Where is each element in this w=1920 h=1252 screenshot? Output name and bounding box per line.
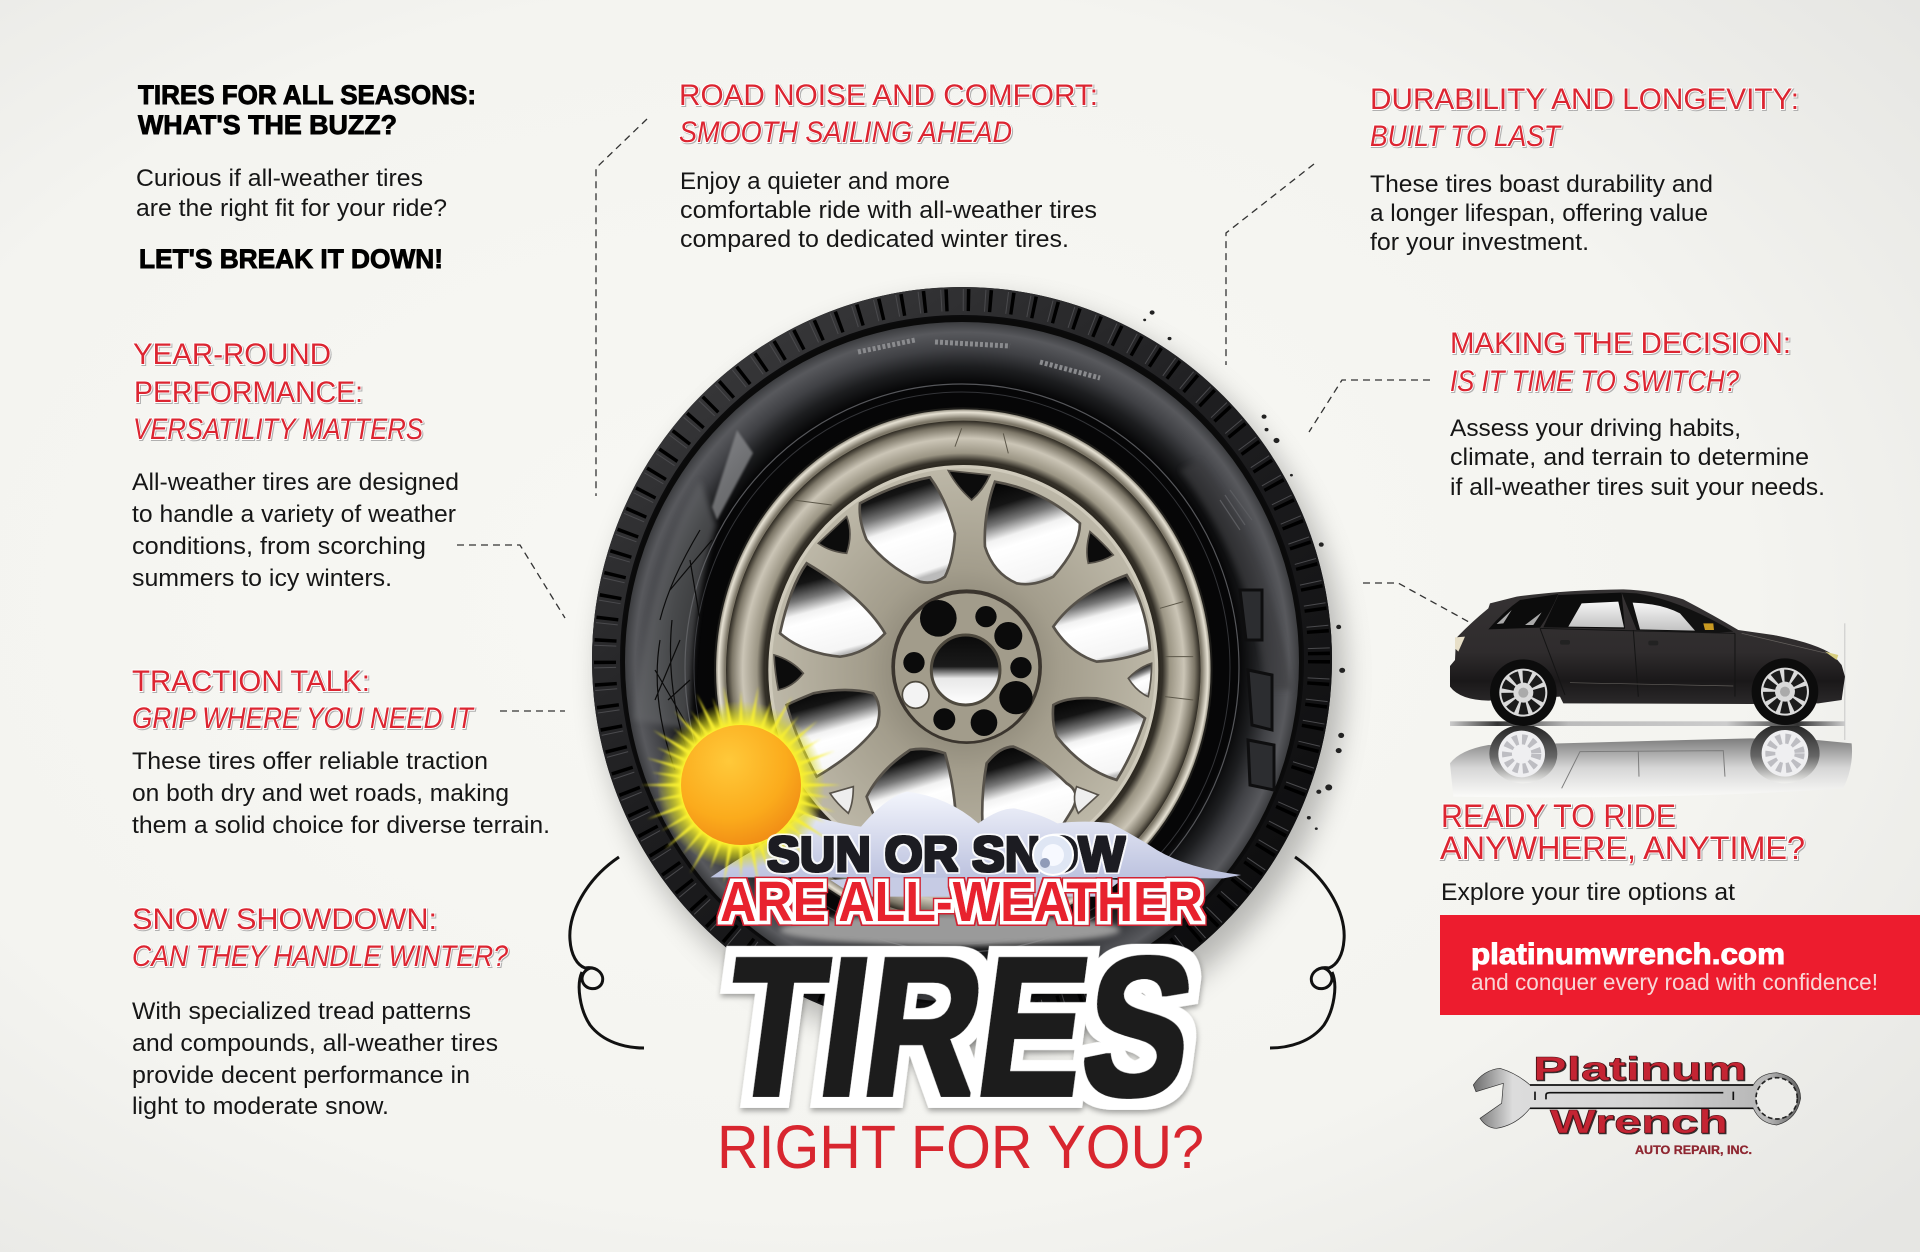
body text: Enjoy a quieter and more	[680, 168, 950, 195]
heading: SNOW SHOWDOWN:	[132, 903, 437, 936]
body text	[680, 168, 1097, 253]
heading: SMOOTH SAILING AHEAD	[679, 116, 1012, 149]
wheel hub	[891, 589, 1042, 744]
intro heading: WHAT'S THE BUZZ?	[138, 110, 397, 140]
body text: light to moderate snow.	[132, 1093, 389, 1120]
website address: platinumwrench.com	[1471, 938, 1785, 971]
body text	[1450, 415, 1825, 501]
heading: TRACTION TALK:	[132, 665, 370, 698]
body text: for your investment.	[1370, 229, 1589, 256]
illustration: car	[1450, 589, 1852, 797]
heading	[132, 665, 475, 735]
left decorative bracket	[570, 857, 644, 1048]
rear wheel	[1490, 659, 1557, 726]
heading: VERSATILITY MATTERS	[133, 413, 423, 446]
intro heading: TIRES FOR ALL SEASONS:	[138, 80, 476, 110]
heading: ROAD NOISE AND COMFORT:	[679, 79, 1098, 112]
body text: a longer lifespan, offering value	[1370, 200, 1708, 227]
panel: durability and longevity	[1370, 83, 1799, 256]
tire debris dots	[1143, 310, 1345, 830]
body text: comfortable ride with all-weather tires	[680, 197, 1097, 224]
heading	[679, 79, 1098, 149]
body text	[132, 748, 550, 839]
snowball letter accent	[1033, 835, 1073, 875]
heading	[1440, 798, 1805, 866]
intro text: are the right fit for your ride?	[136, 195, 447, 222]
body text	[132, 998, 498, 1120]
intro text	[136, 165, 447, 222]
wrench icon	[1473, 1068, 1801, 1128]
panel: road noise and comfort	[679, 79, 1098, 253]
panel: intro	[136, 80, 476, 274]
car body	[1450, 589, 1845, 704]
body text: summers to icy winters.	[132, 565, 392, 592]
heading	[1370, 83, 1799, 153]
body text: them a solid choice for diverse terrain.	[132, 812, 550, 839]
intro heading	[138, 80, 476, 140]
heading: READY TO RIDE	[1441, 798, 1676, 834]
title line: right for you: RIGHT FOR YOU?	[717, 1113, 1204, 1181]
body text	[1370, 171, 1713, 256]
body text: Assess your driving habits,	[1450, 415, 1741, 442]
panel: snow showdown	[132, 903, 508, 1120]
body text: These tires offer reliable traction	[132, 748, 488, 775]
logo word: platinum: Platinum	[1533, 1050, 1747, 1087]
heading: IS IT TIME TO SWITCH?	[1450, 365, 1739, 398]
banner tagline: and conquer every road with confidence!	[1471, 969, 1878, 995]
panel: ready to ride	[1440, 798, 1920, 1015]
intro text: Curious if all-weather tires	[136, 165, 423, 192]
intro call to action: LET'S BREAK IT DOWN!	[139, 244, 443, 274]
title line: tires: TIRES	[712, 917, 1205, 1138]
title line: sun or snow: SUN OR SNOW	[767, 828, 1126, 882]
illustration: wheel rim	[715, 408, 1212, 932]
heading: GRIP WHERE YOU NEED IT	[132, 702, 475, 735]
grey tire lip behind title	[780, 914, 1120, 946]
illustration: tire	[592, 287, 1344, 1052]
body text: compared to dedicated winter tires.	[680, 226, 1069, 253]
wheel small openings	[774, 471, 1152, 813]
heading: BUILT TO LAST	[1370, 120, 1562, 153]
logo word: wrench: Wrench	[1550, 1103, 1728, 1140]
heading: CAN THEY HANDLE WINTER?	[132, 940, 508, 973]
rim barrel	[715, 408, 1212, 932]
body text: With specialized tread patterns	[132, 998, 471, 1025]
logo: platinum wrench	[1473, 1050, 1801, 1157]
title line: are all-weather: ARE ALL-WEATHER	[720, 870, 1203, 934]
logo subtitle: AUTO REPAIR, INC.	[1635, 1143, 1752, 1157]
heading: YEAR-ROUND	[133, 338, 331, 371]
panel: making the decision	[1450, 327, 1825, 501]
body text: and compounds, all-weather tires	[132, 1030, 498, 1057]
body text: on both dry and wet roads, making	[132, 780, 509, 807]
body text: All-weather tires are designed	[132, 469, 459, 496]
body text: These tires boast durability and	[1370, 171, 1713, 198]
front wheel	[1752, 658, 1818, 725]
panel: year-round performance	[132, 338, 459, 592]
heading	[133, 338, 423, 446]
panel: traction talk	[132, 665, 550, 839]
dashed connector lines	[457, 119, 1469, 711]
ground line	[1450, 721, 1845, 726]
body text: Explore your tire options at	[1441, 879, 1735, 906]
heading: DURABILITY AND LONGEVITY:	[1370, 83, 1799, 116]
body text: provide decent performance in	[132, 1062, 470, 1089]
body text	[132, 469, 459, 592]
heading: ANYWHERE, ANYTIME?	[1440, 830, 1805, 866]
red website banner	[1440, 915, 1920, 1015]
heading: PERFORMANCE:	[134, 376, 363, 409]
car windows	[1455, 593, 1838, 697]
main title	[712, 828, 1205, 1181]
body text: conditions, from scorching	[132, 533, 426, 560]
heading: MAKING THE DECISION:	[1450, 327, 1791, 360]
car reflection	[1450, 723, 1852, 797]
wheel windows	[780, 477, 1150, 840]
heading	[1450, 327, 1791, 398]
right decorative bracket	[1270, 857, 1344, 1048]
illustration: snow mountains	[711, 792, 1241, 897]
body text: climate, and terrain to determine	[1450, 444, 1809, 471]
body text: if all-weather tires suit your needs.	[1450, 474, 1825, 501]
body text: to handle a variety of weather	[132, 501, 456, 528]
illustration: sun	[641, 686, 841, 884]
heading	[132, 903, 508, 973]
